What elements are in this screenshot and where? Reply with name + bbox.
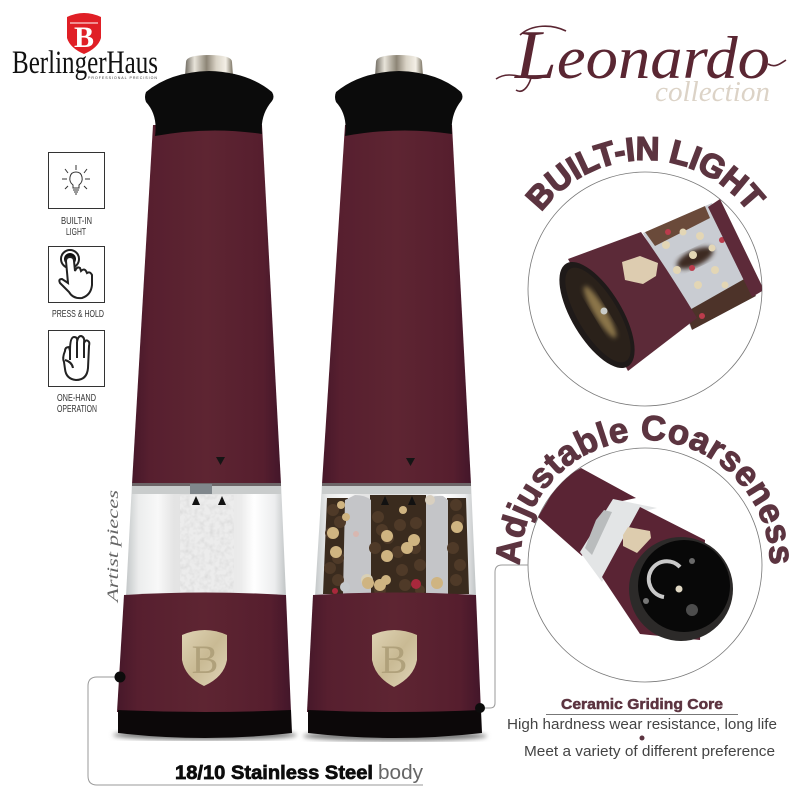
heading: Ceramic Griding Core: [561, 696, 723, 713]
adjustment arrows: [192, 496, 200, 505]
connector line: [88, 677, 423, 785]
silver knob: [375, 55, 423, 76]
heading: Adjustable Coarseness: [496, 415, 789, 564]
collection subtitle: collection: [655, 76, 770, 108]
core centre: [676, 586, 682, 592]
black cap: [145, 71, 274, 136]
label: PRESS & HOLD: [52, 308, 104, 320]
brand tagline: PROFESSIONAL PRECISION: [88, 76, 157, 80]
connector line: [480, 565, 528, 708]
shadow: [303, 731, 487, 741]
feature icons: [48, 152, 104, 415]
open end: [629, 537, 733, 641]
gold shield badge: B: [192, 637, 218, 682]
gold badge: [623, 527, 651, 553]
callout: stainless steel body: body: [378, 762, 423, 784]
marker dot: [475, 703, 485, 713]
ceramic grinding core text: [507, 696, 777, 760]
feature: one-hand operation: OPERATION: [57, 403, 97, 415]
brand name: BerlingerHaus: [12, 45, 158, 81]
product close-up: grinder mechanism: [538, 468, 733, 641]
gold shield badge: [182, 630, 227, 686]
icon: open hand: [63, 336, 89, 380]
callout: adjustable coarseness: [475, 415, 789, 713]
gold shield badge: [372, 630, 417, 687]
feature: one-hand operation: [48, 330, 104, 415]
caption: 18/10 Stainless Steel: [175, 762, 373, 784]
setting arrow: [406, 458, 415, 466]
icon: red shield: [67, 13, 101, 54]
gold badge: [622, 256, 658, 284]
black cap: [335, 71, 462, 136]
wordmark flourishes: [496, 26, 786, 91]
gold shield badge: B: [381, 637, 407, 682]
glass rim: [322, 483, 471, 486]
silver knob: [185, 55, 233, 76]
collection title: [496, 17, 786, 108]
label: BUILT-IN: [61, 215, 92, 227]
feature: built-in light: LIGHT: [66, 226, 86, 238]
glass chamber: [315, 483, 476, 596]
Leonardo wordmark: Leonardo: [514, 17, 770, 94]
salt grinder: [113, 55, 297, 740]
feature: built-in light: [48, 152, 104, 238]
lower body: [117, 592, 291, 712]
feature: press and hold: [48, 246, 104, 320]
pepper grinder: [303, 55, 487, 741]
upper maroon body: [538, 468, 636, 556]
black base: [308, 710, 482, 738]
setting arrow: [216, 457, 225, 465]
callout: built-in light: [524, 136, 768, 406]
glass rim: [132, 483, 281, 486]
maroon end band: [708, 199, 764, 297]
icon: light bulb: [62, 165, 90, 194]
brand logo: [12, 13, 158, 81]
salt fill: [180, 495, 234, 594]
icon: red shield: B: [74, 21, 94, 54]
lower maroon sleeve: [602, 507, 705, 640]
body line two: Meet a variety of different preference: [524, 743, 775, 760]
shadow: [113, 730, 297, 740]
glass chamber: [126, 483, 286, 596]
detail circle: [528, 172, 762, 406]
maroon sleeve: [568, 232, 697, 371]
glass chamber: [643, 203, 756, 330]
product close-up: grinder end: [559, 199, 762, 371]
screws: [689, 558, 695, 564]
ceramic core ring: [649, 561, 680, 597]
icon: pressing hand: [59, 250, 92, 298]
open end: [559, 262, 635, 368]
peppercorn chamber: [323, 495, 469, 596]
body line one: High hardness wear resistance, long life: [507, 716, 777, 733]
detail circle: [528, 448, 762, 682]
black base: [118, 710, 292, 738]
marker dot: [114, 672, 126, 682]
label: ONE-HAND: [57, 392, 96, 404]
lower body: [307, 592, 481, 712]
adjustment arrows: [381, 496, 389, 505]
Artist pieces signature: Artist pieces: [105, 490, 122, 603]
callout: stainless steel body: [88, 672, 423, 785]
heading: BUILT-IN LIGHT: [524, 136, 768, 212]
upper body: [322, 125, 471, 484]
bullet: [640, 736, 644, 740]
grinder screw: [600, 308, 608, 314]
upper body: [132, 125, 281, 484]
glass band: [580, 499, 657, 582]
